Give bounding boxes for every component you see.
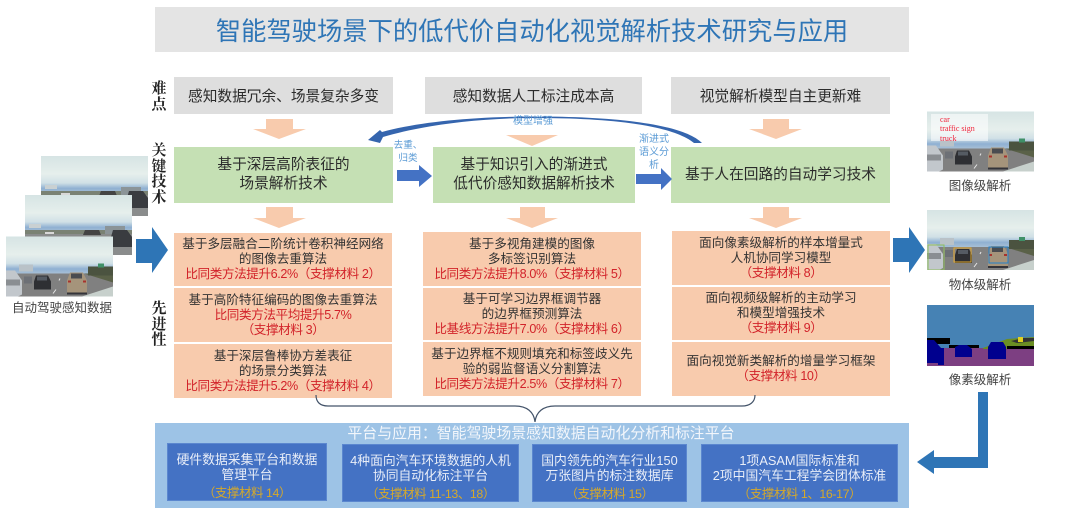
caption: image level: 图像级解析 xyxy=(949,179,1011,193)
technique box 1 xyxy=(174,147,393,203)
method 3-3: （支撑材料 10） xyxy=(736,369,826,383)
difficulty box 3: 视觉解析模型自主更新难 xyxy=(700,89,861,105)
arrow: input xyxy=(136,227,168,273)
label: 去重归类: 去重、 xyxy=(394,140,422,151)
arrow: box 1 to box 2 xyxy=(397,165,432,187)
brace xyxy=(315,395,756,422)
method 3-2: 和模型增强技术 xyxy=(737,306,825,320)
method 2-1: 多标签识别算法 xyxy=(488,252,576,266)
method 3-1 xyxy=(672,231,890,285)
output image: pixel level xyxy=(927,305,1034,366)
method 2-3: 验的弱监督语义分割算法 xyxy=(463,362,601,376)
method 1-1: 比同类方法提升6.2%（支撑材料 2） xyxy=(185,267,381,281)
output photo: image level: truck xyxy=(940,134,956,143)
output photo: object level xyxy=(927,210,1034,270)
difficulty box 1 xyxy=(174,77,393,114)
label: 难点: 点 xyxy=(151,96,166,112)
method 2-2: 的边界框预测算法 xyxy=(482,306,582,320)
output photo: image level: car xyxy=(940,115,950,124)
label: 关键技术 xyxy=(151,142,166,206)
method 3-2: （支撑材料 9） xyxy=(740,321,822,335)
platform item 3: （支撑材料 15） xyxy=(566,486,653,500)
method 3-2: 面向视频级解析的主动学习 xyxy=(705,291,857,305)
label: 去重归类 xyxy=(394,140,422,164)
photo 2 xyxy=(25,195,132,255)
platform item 2 xyxy=(342,444,519,502)
difficulty box 2: 感知数据人工标注成本高 xyxy=(453,89,614,105)
platform item 1: 硬件数据采集平台和数据 xyxy=(177,452,317,466)
platform heading: 平台与应用：智能驾驶场景感知数据自动化分析和标注平台 xyxy=(347,426,735,442)
panel: methods 3 xyxy=(672,231,890,396)
method 2-1: 基于多视角建模的图像 xyxy=(469,236,595,250)
method 3-1: （支撑材料 8） xyxy=(740,266,822,280)
method 1-2: 基于高阶特征编码的图像去重算法 xyxy=(189,292,377,306)
platform item 3 xyxy=(532,444,687,502)
label: 先进性: 进 xyxy=(151,316,166,332)
platform item 3: 万张图片的标注数据库 xyxy=(546,468,673,482)
arrow: output xyxy=(893,227,925,273)
label: 渐进式语义分析 xyxy=(639,133,669,171)
panel: methods 1 xyxy=(174,233,392,398)
technique box 1: 场景解析技术 xyxy=(239,176,328,192)
method 1-2: （支撑材料 3） xyxy=(242,322,324,336)
platform item 4 xyxy=(701,444,898,502)
platform item 4: 2项中国汽车工程学会团体标准 xyxy=(713,468,886,482)
method 2-2: 比基线方法提升7.0%（支撑材料 6） xyxy=(434,322,630,336)
caption: object level: 物体级解析 xyxy=(949,278,1011,292)
method 1-2 xyxy=(174,288,392,342)
method 3-3: 面向视觉新类解析的增量学习框架 xyxy=(687,354,875,368)
title: 智能驾驶场景下的低代价自动化视觉解析技术研究与应用 xyxy=(216,18,848,46)
technique box 2 xyxy=(433,147,635,203)
label: 关键技术: 关 xyxy=(151,143,166,159)
platform item 1 xyxy=(167,443,327,501)
label: 去重归类: 归类 xyxy=(398,153,418,164)
label: 难点: 难 xyxy=(151,81,166,97)
label: 模型增强: 模型增强 xyxy=(513,116,553,127)
method 1-3: 比同类方法提升5.2%（支撑材料 4） xyxy=(185,378,381,392)
label: 渐进式语义分析: 语义分 xyxy=(639,147,669,158)
difficulty box 2 xyxy=(425,77,642,114)
panel: platform xyxy=(155,423,909,508)
method 2-2: 基于可学习边界框调节器 xyxy=(463,292,601,306)
method 2-2 xyxy=(423,288,641,340)
label: 渐进式语义分析: 析 xyxy=(649,160,659,171)
arrow: box 2 to box 3 xyxy=(636,168,672,190)
technique box 2: 基于知识引入的渐进式 xyxy=(461,157,607,173)
technique box 3 xyxy=(671,147,890,203)
difficulty box 1: 感知数据冗余、场景复杂多变 xyxy=(188,89,379,105)
method 2-1: 比同类方法提升8.0%（支撑材料 5） xyxy=(434,266,630,280)
method 1-3: 基于深层鲁棒协方差表征 xyxy=(214,348,352,362)
platform item 4: （支撑材料 1、16-17） xyxy=(738,486,861,500)
output photo: image level xyxy=(927,112,1034,172)
label: 先进性: 性 xyxy=(151,332,166,348)
platform item 3: 国内领先的汽车行业150 xyxy=(541,452,678,468)
panel: methods 2 xyxy=(423,232,641,396)
platform item 2: 4种面向汽车环境数据的人机 xyxy=(350,452,511,468)
photo 1 xyxy=(41,156,148,216)
title xyxy=(155,7,909,52)
label: 渐进式语义分析: 渐进式 xyxy=(639,134,669,145)
platform item 1: （支撑材料 14） xyxy=(203,486,291,500)
technique box 2: 低代价感知数据解析技术 xyxy=(453,176,615,192)
platform item 4: 1项ASAM国际标准和 xyxy=(739,452,860,468)
method 2-1 xyxy=(423,232,641,286)
technique box 1: 基于深层高阶表征的 xyxy=(217,157,350,173)
caption: pixel level: 像素级解析 xyxy=(949,373,1011,387)
method 1-3 xyxy=(174,344,392,398)
method 2-3 xyxy=(423,342,641,396)
curved arrow: model enhancement xyxy=(368,116,702,143)
method 1-1 xyxy=(174,233,392,286)
output photo: image level: traffic sign xyxy=(940,124,975,133)
method 3-1: 人机协同学习模型 xyxy=(731,250,831,264)
label: 难点 xyxy=(151,80,166,112)
label: 关键技术: 技 xyxy=(151,174,166,190)
platform item 1: 管理平台 xyxy=(221,466,273,482)
method 2-3: 比同类方法提升2.5%（支撑材料 7） xyxy=(434,376,630,390)
technique box 3: 基于人在回路的自动学习技术 xyxy=(685,166,876,182)
label: 先进性: 先 xyxy=(151,301,166,317)
photo 3 xyxy=(6,236,113,296)
method 2-3: 基于边界框不规则填充和标签歧义先 xyxy=(431,346,633,360)
method 1-1: 基于多层融合二阶统计卷积神经网络 xyxy=(182,237,384,251)
caption: input data: 自动驾驶感知数据 xyxy=(12,301,112,315)
method 1-1: 的图像去重算法 xyxy=(239,252,327,266)
label: 关键技术: 键 xyxy=(151,158,166,174)
arrow: feedback to platform xyxy=(917,392,988,474)
label: 关键技术: 术 xyxy=(151,190,166,206)
platform item 2: 协同自动化标注平台 xyxy=(373,468,488,482)
input photos: stacked xyxy=(6,156,148,296)
difficulty box 3 xyxy=(671,77,890,114)
method 3-2 xyxy=(672,287,890,340)
platform item 2: （支撑材料 11-13、18） xyxy=(366,486,495,500)
label: 先进性 xyxy=(151,300,166,348)
method 3-3 xyxy=(672,342,890,396)
method 1-2: 比同类方法平均提升5.7% xyxy=(215,308,351,322)
method 1-3: 的场景分类算法 xyxy=(239,364,327,378)
method 3-1: 面向像素级解析的样本增量式 xyxy=(699,236,863,250)
